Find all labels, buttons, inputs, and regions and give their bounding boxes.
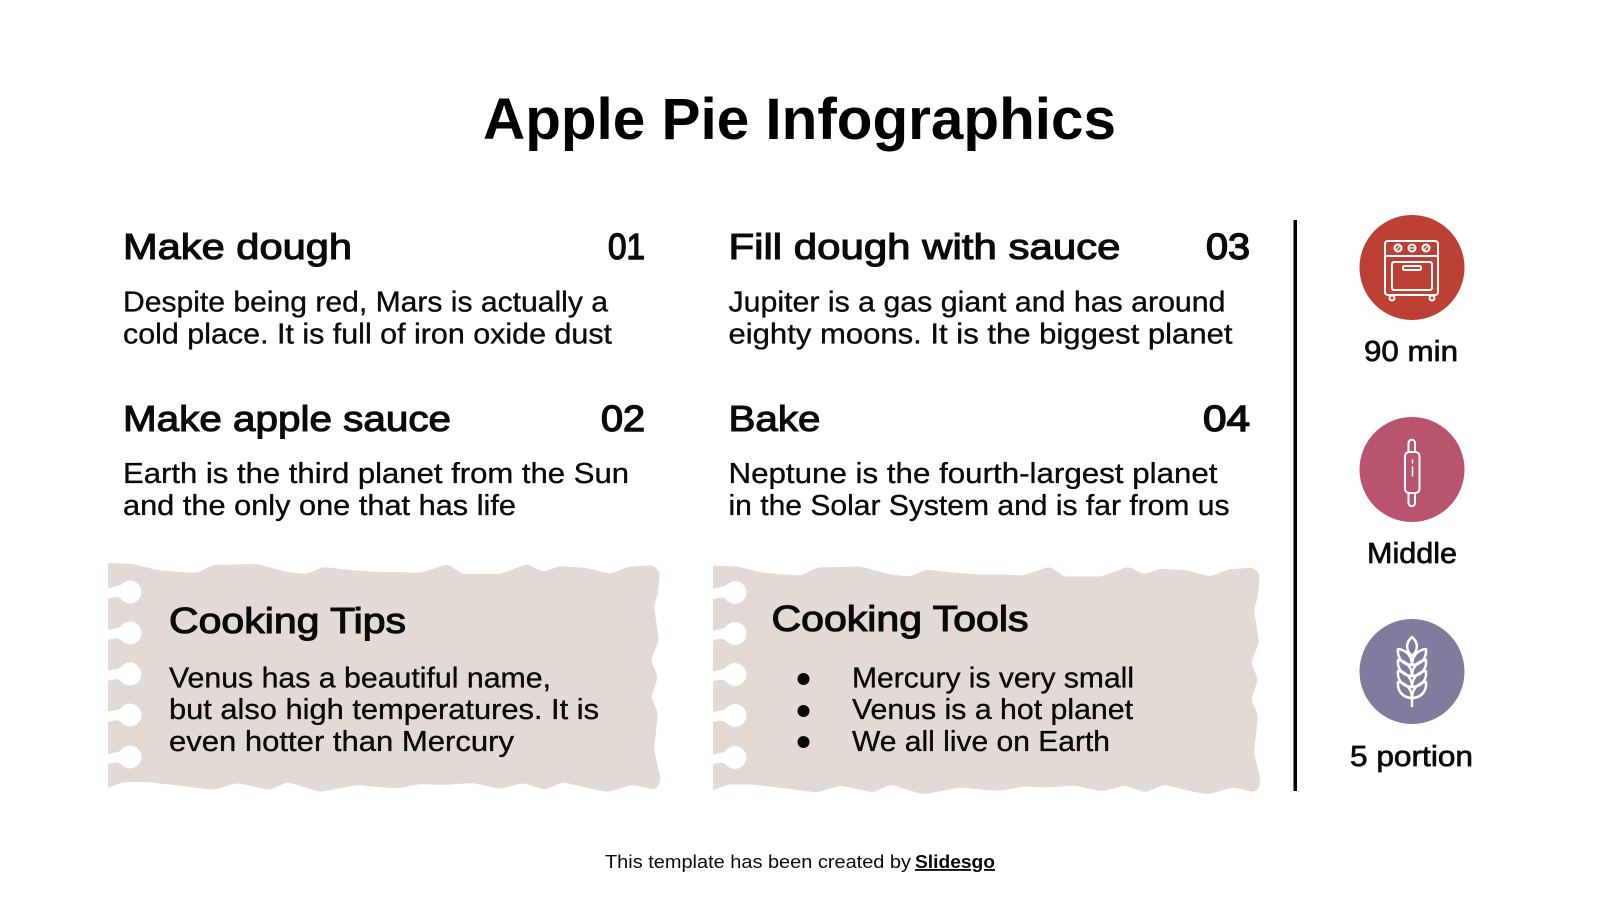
heading: make apple sauce: Make apple sauce: [123, 398, 451, 439]
stat: portions: [1350, 619, 1473, 773]
panel: cooking tools: [697, 564, 1261, 794]
number 02: 02: [601, 398, 645, 439]
description: make dough: cold place. It is full of iron oxide dust: [123, 319, 612, 351]
description: bake: Neptune is the fourth-largest planet: [728, 458, 1218, 490]
number 03: 03: [1206, 226, 1250, 267]
title: Apple Pie Infographics: [483, 87, 1116, 152]
icon: rolling pin: [1360, 417, 1464, 522]
footer credit: Slidesgo: [915, 851, 995, 872]
text: cooking tips: even hotter than Mercury: [169, 726, 515, 758]
number 04: 04: [1203, 398, 1250, 439]
stat: time: [1360, 215, 1464, 368]
list: cooking tools: We all live on Earth: [852, 726, 1110, 758]
panel: cooking tips: [92, 562, 661, 792]
text: cooking tips: but also high temperatures. It is: [169, 694, 599, 726]
stat: difficulty: [1360, 417, 1464, 570]
description: make dough: Despite being red, Mars is actually a: [123, 287, 609, 319]
list: cooking tools: [798, 663, 1134, 758]
description: fill dough with sauce: eighty moons. It is the biggest planet: [728, 319, 1232, 351]
label: 5 portion: 5 portion: [1350, 741, 1473, 773]
label: middle: Middle: [1367, 538, 1457, 570]
heading: cooking tools: Cooking Tools: [772, 598, 1028, 639]
heading: make dough: Make dough: [123, 226, 352, 267]
icon: wheat: [1360, 619, 1464, 724]
description: make apple sauce: and the only one that has life: [123, 490, 516, 522]
step 03: fill dough with sauce: [728, 226, 1250, 351]
heading: bake: Bake: [728, 398, 820, 439]
step 01: make dough: [123, 226, 645, 351]
description: make apple sauce: Earth is the third planet from the Sun: [123, 458, 629, 490]
footer credit: This template has been created by: [605, 851, 912, 872]
list: cooking tools: Mercury is very small: [852, 663, 1134, 695]
step 02: make apple sauce: [123, 398, 645, 522]
description: fill dough with sauce: Jupiter is a gas giant and has around: [728, 287, 1226, 319]
list: cooking tools: Venus is a hot planet: [852, 694, 1133, 726]
heading: fill dough with sauce: Fill dough with sauce: [728, 226, 1120, 267]
label: 90 min: 90 min: [1364, 336, 1458, 368]
step 04: bake: [728, 398, 1250, 522]
heading: cooking tips: Cooking Tips: [169, 600, 406, 641]
icon: oven: [1360, 215, 1464, 320]
text: cooking tips: Venus has a beautiful name,: [169, 663, 551, 695]
number 01: 01: [608, 226, 645, 267]
description: bake: in the Solar System and is far from us: [728, 490, 1230, 522]
